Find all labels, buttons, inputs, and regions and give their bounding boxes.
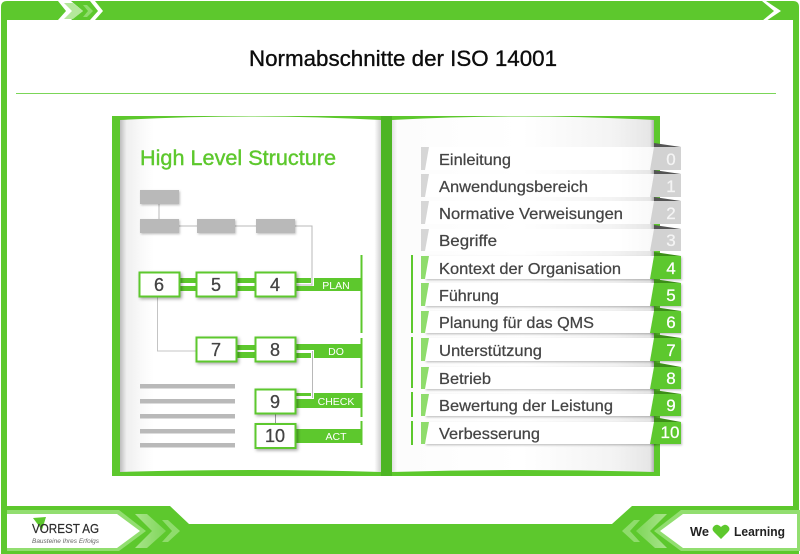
placeholder text lines [140, 384, 235, 448]
We: We [690, 524, 709, 539]
logo tagline: Bausteine Ihres Erfolgs [32, 538, 100, 545]
row 4: Kontext der Organisation [421, 252, 681, 279]
row 1: Anwendungsbereich [421, 170, 681, 197]
row 8: Betrieb: Betrieb [439, 371, 491, 388]
row 8: Betrieb: 8 [666, 369, 676, 388]
row 8: Betrieb [421, 362, 681, 389]
connector bars between clauses [179, 278, 255, 358]
right page [392, 116, 654, 472]
footer right plate [654, 510, 800, 551]
DO band [295, 344, 361, 358]
row 10: Verbesserung: 10 [661, 423, 679, 442]
row 6: Planung für das QMS: Planung für das QMS [439, 315, 594, 332]
row 1: Anwendungsbereich: 1 [666, 177, 676, 196]
top bar chevrons [58, 1, 103, 20]
row 2: Normative Verweisungen: Normative Verweisungen [439, 206, 623, 223]
ACT band [295, 429, 361, 443]
CHECK band [295, 393, 361, 408]
footer left logo plate [7, 510, 146, 551]
DO band: DO [328, 346, 344, 358]
row 1: Anwendungsbereich: Anwendungsbereich [439, 179, 588, 196]
clause box 7 [196, 338, 236, 362]
clause box 9 [256, 390, 296, 414]
row 2: Normative Verweisungen [421, 197, 681, 224]
row 0: Einleitung: Einleitung [439, 152, 511, 169]
row 5: Führung [421, 279, 681, 306]
row 9: Bewertung der Leistung: Bewertung der Leistung [439, 398, 613, 415]
group markers beside the clause list [411, 255, 413, 445]
row 3: Begriffe: 3 [666, 231, 676, 250]
clause box 10: 10 [265, 426, 285, 446]
PLAN band: PLAN [322, 280, 350, 292]
logo wordmark: VOREST AG [32, 522, 99, 536]
Learning: Learning [734, 524, 785, 539]
row 6: Planung für das QMS [421, 307, 681, 333]
footer left chevrons [135, 514, 180, 548]
clause box 6: 6 [154, 275, 164, 295]
book cover [112, 116, 660, 476]
row 0: Einleitung [421, 143, 681, 170]
row 3: Begriffe: Begriffe [439, 233, 497, 250]
row 7: Unterstützung: 7 [666, 341, 676, 360]
book spine [381, 116, 392, 476]
clause box 5: 5 [211, 275, 221, 295]
row 10: Verbesserung: Verbesserung [439, 426, 540, 443]
ACT band: ACT [326, 431, 347, 443]
connector lines between clauses [158, 296, 312, 424]
row 5: Führung: 5 [666, 286, 676, 305]
left page [120, 116, 381, 472]
title divider [16, 93, 776, 94]
clause box 9: 9 [270, 392, 280, 412]
row 10: Verbesserung [421, 417, 681, 444]
clause box 10 [256, 424, 296, 448]
footer right chevrons [622, 514, 667, 548]
clause box 4 [256, 272, 296, 296]
CHECK band: CHECK [318, 396, 354, 408]
clause box 5 [196, 272, 236, 296]
icon: logo triangle [33, 517, 46, 530]
row 7: Unterstützung: Unterstützung [439, 343, 542, 360]
icon: heart [712, 525, 730, 539]
clause list [421, 143, 681, 444]
row 9: Bewertung der Leistung [421, 390, 681, 416]
row 2: Normative Verweisungen: 2 [666, 204, 676, 223]
clause box 7: 7 [211, 340, 221, 360]
gray legacy flowchart [140, 190, 312, 285]
clause box 4: 4 [270, 275, 280, 295]
top bar right chevron [762, 1, 781, 21]
title: Normabschnitte der ISO 14001 [249, 46, 557, 71]
clause box 8: 8 [270, 340, 280, 360]
heading: High Level Structure: High Level Structure [140, 147, 336, 170]
row 5: Führung: Führung [439, 288, 499, 305]
clause box 6 [140, 272, 180, 296]
PDCA vertical divider [360, 255, 362, 445]
row 0: Einleitung: 0 [666, 150, 676, 169]
row 6: Planung für das QMS: 6 [666, 313, 676, 332]
row 4: Kontext der Organisation: Kontext der Organisation [439, 261, 621, 278]
row 3: Begriffe [421, 225, 681, 251]
row 4: Kontext der Organisation: 4 [666, 259, 676, 278]
PLAN band [295, 278, 361, 292]
row 7: Unterstützung [421, 334, 681, 361]
row 9: Bewertung der Leistung: 9 [666, 396, 676, 415]
clause box 8 [256, 338, 296, 362]
